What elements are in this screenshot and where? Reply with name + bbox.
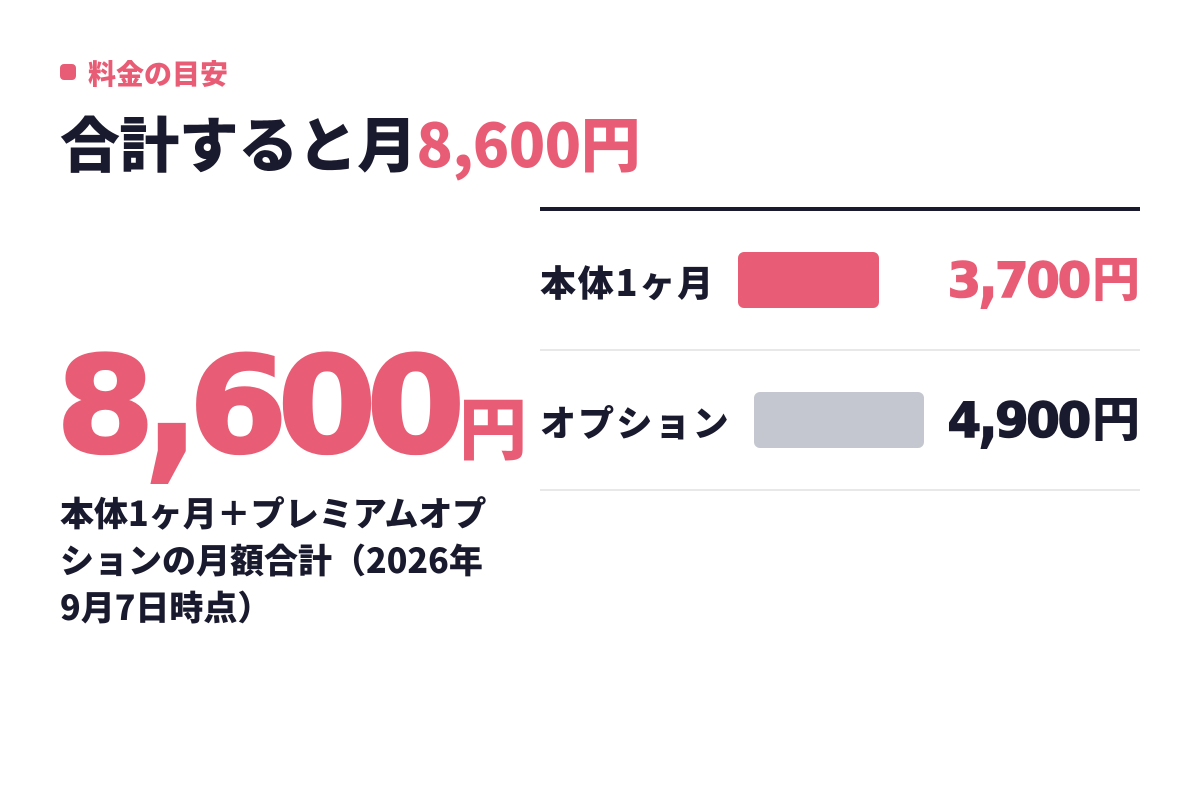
value: 3 700 bbox=[948, 253, 1089, 309]
panel: breakdown bbox=[540, 207, 1140, 491]
label: オプション bbox=[540, 395, 731, 447]
unit: 円 bbox=[1092, 380, 1140, 450]
value: , bbox=[979, 242, 995, 315]
top rule bbox=[540, 207, 1140, 211]
total amount: 8 600 bbox=[56, 329, 455, 484]
bar bbox=[738, 252, 879, 308]
label: 本体1ヶ月 bbox=[540, 255, 715, 307]
title: 合計すると月8,600円 bbox=[60, 98, 640, 185]
eyebrow text: 料金の目安 bbox=[88, 53, 228, 93]
row: 本体1ヶ月 bbox=[540, 211, 1140, 351]
value: 4 900 bbox=[948, 393, 1089, 449]
icon: square marker bbox=[60, 64, 76, 80]
total amount: , bbox=[145, 297, 189, 499]
row: オプション bbox=[540, 351, 1140, 491]
total description: 本体1ヶ月＋プレミアムオプションの月額合計（2026年9月7日時点） bbox=[60, 487, 486, 630]
total unit: 円 bbox=[459, 375, 527, 474]
bar bbox=[754, 392, 924, 448]
eyebrow label bbox=[60, 53, 228, 93]
panel: total bbox=[56, 297, 527, 630]
unit: 円 bbox=[1092, 240, 1140, 310]
value: , bbox=[979, 382, 995, 455]
